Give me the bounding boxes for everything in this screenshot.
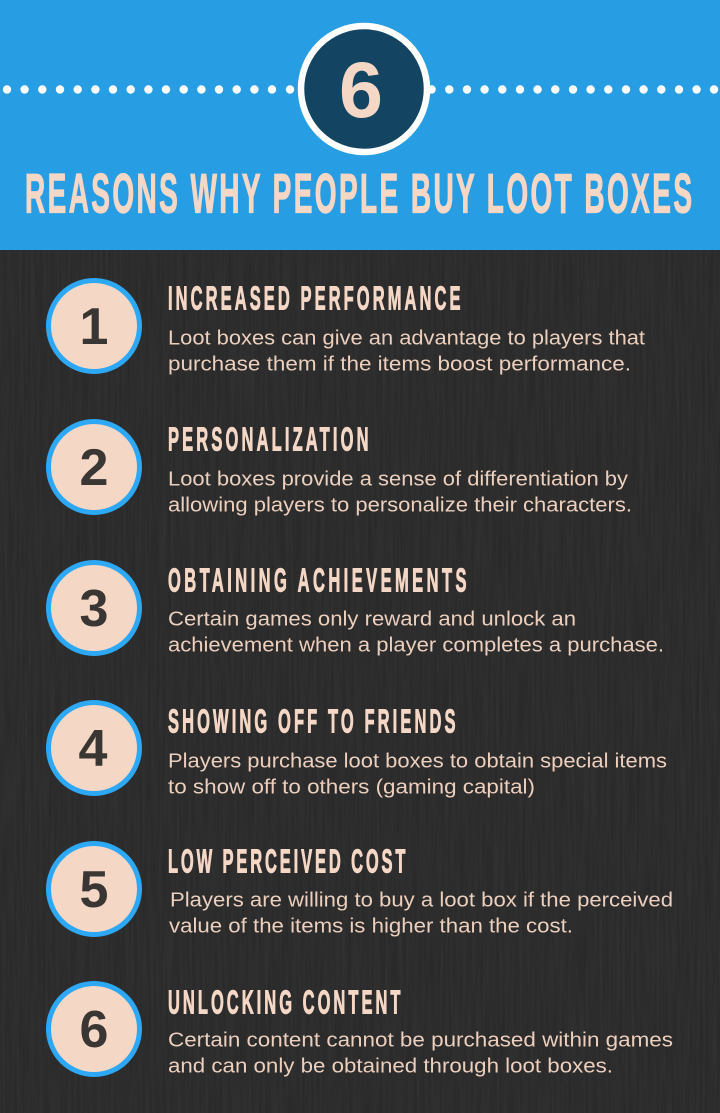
number badge 4: 4 xyxy=(79,720,108,778)
text 4: Players purchase loot boxes to obtain special items xyxy=(168,750,667,772)
number badge 5: 5 xyxy=(80,861,108,919)
text 5: value of the items is higher than the cost. xyxy=(169,916,573,938)
text 4: to show off to others (gaming capital) xyxy=(168,776,535,798)
number badge 4 xyxy=(48,702,140,794)
text 6 xyxy=(168,1030,673,1078)
reason 1 xyxy=(48,279,645,376)
text 3 xyxy=(168,608,664,656)
text 1: purchase them if the items boost performance. xyxy=(168,354,631,376)
number badge 6 xyxy=(48,984,140,1074)
text 2: allowing players to personalize their characters. xyxy=(168,494,632,516)
text 1 xyxy=(168,328,645,376)
number badge 2 xyxy=(48,422,140,512)
text 5 xyxy=(169,890,673,938)
heading 3: OBTAINING ACHIEVEMENTS xyxy=(168,561,466,599)
heading 4: SHOWING OFF TO FRIENDS xyxy=(168,702,456,740)
text 6: Certain content cannot be purchased within games xyxy=(168,1030,673,1052)
text 3: Certain games only reward and unlock an xyxy=(168,608,576,630)
number badge 5 xyxy=(48,844,140,934)
number badge 2: 2 xyxy=(80,439,108,497)
big number badge xyxy=(301,26,427,152)
number badge 1 xyxy=(48,280,140,372)
dark textured background xyxy=(0,250,720,1113)
reason 6 xyxy=(48,983,673,1078)
text 2: Loot boxes provide a sense of differentiation by xyxy=(168,468,628,490)
number badge 1: 1 xyxy=(80,298,108,356)
big number badge: 6 xyxy=(339,45,383,134)
reason 4 xyxy=(48,702,667,798)
dotted line xyxy=(3,85,718,94)
heading 2: PERSONALIZATION xyxy=(168,420,368,458)
heading 6: UNLOCKING CONTENT xyxy=(168,983,401,1021)
heading 5: LOW PERCEIVED COST xyxy=(168,842,406,880)
title: REASONS WHY PEOPLE BUY LOOT BOXES xyxy=(25,163,692,225)
number badge 6: 6 xyxy=(80,1001,108,1059)
header background xyxy=(0,0,720,250)
text 1: Loot boxes can give an advantage to players that xyxy=(168,328,645,350)
text 6: and can only be obtained through loot boxes. xyxy=(168,1056,613,1078)
text 4 xyxy=(168,750,667,798)
reason 2 xyxy=(48,420,632,516)
text 2 xyxy=(168,468,632,516)
number badge 3: 3 xyxy=(80,580,108,638)
reason 5 xyxy=(48,842,673,938)
text 5: Players are willing to buy a loot box if the perceived xyxy=(170,890,673,912)
heading 1: INCREASED PERFORMANCE xyxy=(168,279,461,317)
reason 3 xyxy=(48,561,664,656)
text 3: achievement when a player completes a purchase. xyxy=(168,634,664,656)
number badge 3 xyxy=(48,562,140,654)
